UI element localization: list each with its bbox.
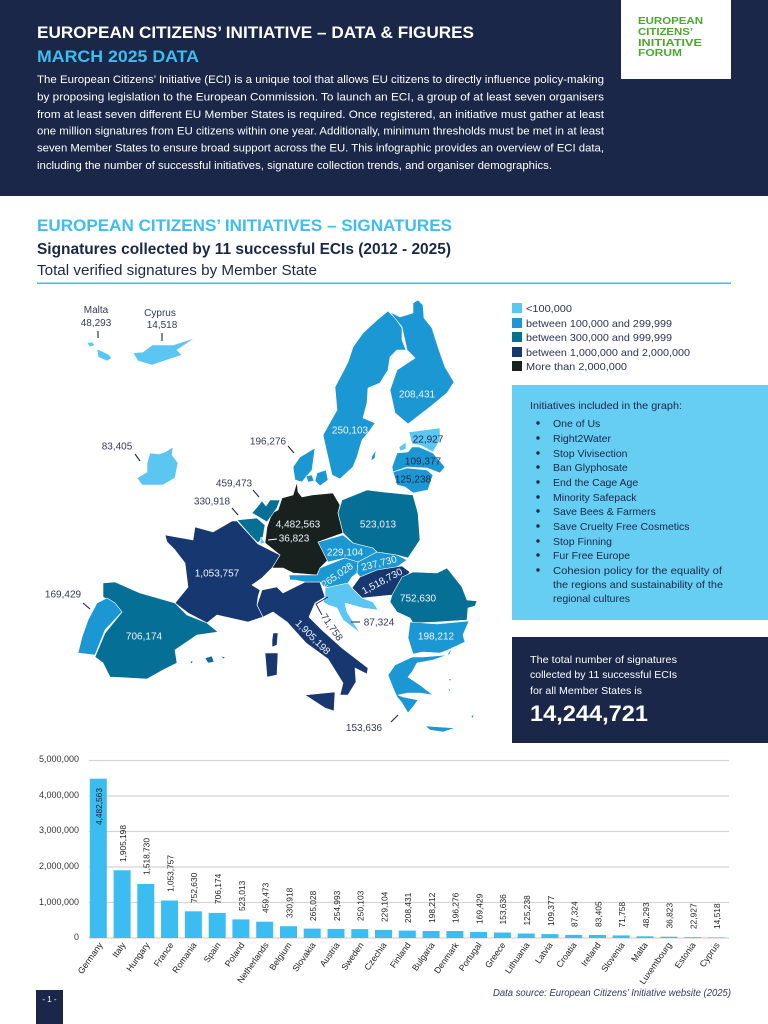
map legend: between 1,000,000 and 2,000,000 (526, 347, 690, 359)
section heading: Signatures collected by 11 successful ECIs (2012 - 2025) (37, 241, 451, 258)
map callout values: 48,293 (81, 318, 112, 329)
y axis labels: 4,000,000 (39, 790, 79, 800)
panel: initiatives included (512, 385, 768, 620)
map callout values: 36,823 (279, 534, 310, 544)
intro paragraph: one million signatures from EU citizens within one year. Additionally, minimum thresholds must be met in at least (37, 126, 604, 138)
intro paragraph: including the number of successful initiatives, signature collection trends, and organiser demographics. (37, 160, 552, 172)
bar value labels: 459,473 (260, 882, 270, 913)
map callout values: 4,482,563 (276, 520, 321, 530)
y axis labels: 3,000,000 (39, 825, 79, 835)
panel: initiatives included: Stop Finning (553, 536, 612, 548)
panel: initiatives included: One of Us (553, 418, 600, 430)
bar value labels: 254,993 (332, 890, 342, 921)
map callout values: 523,013 (360, 520, 397, 530)
map callout values: 196,276 (250, 436, 287, 448)
map callout values: 1,053,757 (195, 568, 240, 580)
bar category labels: Latvia (533, 940, 555, 965)
bar category labels: Netherlands (235, 940, 271, 985)
bar category labels: Portugal (457, 940, 484, 973)
Poland (338, 490, 420, 558)
bar category labels: Estonia (673, 940, 698, 970)
map callout values: 14,518 (147, 320, 178, 331)
y axis labels: 5,000,000 (39, 754, 79, 764)
logo: European Citizens' Initiative Forum: CITIZENS’ (638, 26, 693, 38)
section heading: Total verified signatures by Member State (37, 262, 317, 279)
map callout values: 83,405 (102, 442, 133, 452)
map legend: More than 2,000,000 (526, 361, 627, 373)
map callout values: 1,905,198 (293, 618, 332, 658)
map callout values: 125,238 (395, 474, 432, 486)
logo: European Citizens' Initiative Forum (621, 0, 731, 79)
bar value labels: 752,630 (189, 872, 199, 903)
bar value labels: 250,103 (356, 890, 366, 921)
Slovenia and Croatia (323, 583, 378, 633)
bar category labels: Hungary (124, 940, 152, 973)
bar category labels: Germany (76, 940, 105, 976)
header band (0, 0, 768, 196)
bar category labels: Poland (223, 940, 247, 969)
bar value labels: 83,405 (594, 901, 604, 927)
bar category labels: Denmark (432, 940, 461, 975)
bar category labels: Slovenia (599, 940, 627, 974)
bar category labels: Czechia (362, 940, 389, 972)
y axis labels: 1,000,000 (39, 897, 79, 907)
Slovakia (357, 552, 407, 577)
bar value labels (94, 788, 722, 929)
bar category labels: Slovakia (290, 940, 318, 973)
map callout values: 109,377 (405, 456, 442, 468)
bar value labels: 4,482,563 (94, 788, 104, 825)
bar value labels: 523,013 (237, 880, 247, 911)
map callout values: 752,630 (400, 594, 437, 604)
bar value labels: 198,212 (427, 892, 437, 923)
panel: initiatives included: regional cultures (553, 593, 630, 605)
Sardinia (265, 653, 278, 677)
Bulgaria (408, 621, 469, 654)
Denmark (293, 448, 328, 486)
map callout values: 229,104 (327, 548, 364, 558)
bar value labels: 22,927 (688, 903, 698, 929)
map callout values: 265,028 (320, 561, 356, 591)
panel: total signatures: 14,244,721 (530, 701, 648, 726)
panel: initiatives included: Cohesion policy for the equality of (553, 565, 722, 577)
map leader lines (83, 331, 398, 722)
bar category labels: Belgium (267, 940, 294, 972)
bar category labels: Finland (388, 940, 413, 970)
bar category labels: Ireland (579, 940, 603, 968)
intro paragraph: The European Citizens’ Initiative (ECI) is a unique tool that allows EU citizens to directly influence policy-making (37, 74, 604, 86)
bar chart: signatures by Member State (39, 754, 729, 986)
map callout values: 208,431 (399, 390, 436, 400)
map callout values: 71,758 (318, 612, 345, 644)
bar value labels: 1,905,198 (118, 825, 128, 862)
Austria (289, 558, 358, 588)
Estonia island (399, 442, 406, 451)
bar category labels: Lithuania (503, 940, 532, 975)
panel: initiatives included: Initiatives included in the graph: (530, 400, 682, 412)
panel: total signatures: collected by 11 successful ECIs (530, 669, 677, 681)
panel: initiatives included: Minority Safepack (553, 492, 637, 504)
map callout values: 169,429 (45, 590, 82, 600)
France (165, 521, 280, 623)
Sicily (305, 692, 335, 711)
page number tab: - 1 - (42, 995, 57, 1004)
Sweden (323, 311, 406, 479)
bar category labels: France (152, 940, 176, 969)
Latvia (392, 447, 445, 473)
section heading: EUROPEAN CITIZENS’ INITIATIVES – SIGNATURES (37, 216, 452, 235)
intro paragraph: by proposing legislation to the European Commission. To launch an ECI, a group of at least seven organisers (37, 92, 605, 104)
bar value labels: 48,293 (641, 902, 651, 928)
Balearic Islands (190, 656, 225, 664)
bar value labels: 169,429 (474, 893, 484, 924)
bar value labels: 109,377 (546, 895, 556, 926)
Luxembourg (260, 537, 265, 544)
bar value labels: 125,238 (522, 895, 532, 926)
panel: initiatives included: Right2Water (553, 433, 611, 445)
bar value labels: 706,174 (213, 873, 223, 904)
panel: initiatives included: Fur Free Europe (553, 550, 630, 562)
map callout values: 237,730 (360, 554, 399, 574)
intro paragraph: from at least seven different EU Member States is required. Once registered, an initiative must gather at least (37, 109, 604, 121)
logo: European Citizens' Initiative Forum: EUROPEAN (638, 15, 703, 27)
bar value labels: 153,636 (498, 894, 508, 924)
bar value labels: 265,028 (308, 890, 318, 921)
bar category labels: Greece (483, 940, 508, 970)
panel: initiatives included: the regions and sustainability of the (553, 579, 723, 591)
bar value labels: 196,276 (450, 892, 460, 923)
panel: initiatives included: End the Cage Age (553, 477, 638, 489)
y axis labels: 2,000,000 (39, 861, 79, 871)
Hungary (352, 566, 410, 598)
bar category labels: Spain (202, 940, 223, 965)
Czechia (318, 535, 377, 562)
map callout values: 706,174 (126, 632, 163, 642)
map callout values: Cyprus (144, 308, 176, 319)
map callout values: 330,918 (194, 496, 231, 508)
map callout values: 1,518,730 (360, 566, 405, 597)
panel: total signatures: The total number of signatures (530, 654, 677, 666)
intro paragraph (37, 74, 605, 172)
bar value labels: 330,918 (284, 887, 294, 918)
title: EUROPEAN CITIZENS’ INITIATIVE – DATA & FIGURES (37, 23, 474, 42)
Finland (390, 300, 454, 424)
subtitle: date: MARCH 2025 DATA (37, 47, 199, 66)
bar category labels: Romania (170, 940, 199, 975)
bar value labels: 229,104 (380, 891, 390, 922)
page number tab (36, 990, 63, 1024)
bar category labels: Bulgaria (410, 940, 437, 973)
y axis labels (39, 754, 79, 942)
map callout values: 198,212 (418, 632, 455, 642)
Belgium (237, 518, 265, 543)
bar category labels: Austria (318, 940, 342, 969)
y axis labels: 0 (74, 932, 79, 942)
panel: initiatives included: Save Cruelty Free Cosmetics (553, 521, 690, 533)
map of EU member states (78, 300, 477, 732)
bar value labels: 71,758 (617, 902, 627, 928)
Italy (257, 582, 368, 695)
panel: total signatures: for all Member States is (530, 685, 642, 697)
Romania (390, 568, 477, 623)
data source note: Data source: European Citizens’ Initiative website (2025) (493, 988, 731, 999)
bar value labels: 1,053,757 (166, 855, 176, 892)
panel: initiatives included: Save Bees & Farmers (553, 506, 656, 518)
Greece (388, 648, 474, 732)
Spain (95, 582, 218, 679)
panel: total signatures (512, 637, 768, 743)
map callout values (45, 305, 455, 734)
Ireland (137, 447, 178, 485)
bar category labels (76, 940, 722, 986)
Portugal (78, 598, 122, 655)
map legend (512, 303, 690, 373)
map legend: between 100,000 and 299,999 (526, 318, 672, 330)
map callout values: 250,103 (332, 426, 369, 436)
map legend: between 300,000 and 999,999 (526, 332, 672, 344)
Corsica (272, 633, 278, 647)
bar category labels: Cyprus (697, 940, 722, 969)
map legend: <100,000 (526, 303, 572, 315)
map callout values: Malta (84, 305, 109, 316)
logo: European Citizens' Initiative Forum: FORUM (638, 47, 682, 59)
Cyprus (133, 338, 195, 365)
bar value labels: 36,823 (664, 903, 674, 928)
Netherlands (252, 500, 280, 522)
bar value labels: 208,431 (403, 892, 413, 923)
bar value labels: 14,518 (712, 903, 722, 929)
map callout values: 459,473 (216, 478, 253, 490)
bars (90, 779, 725, 938)
bar category labels: Italy (110, 940, 128, 959)
Germany (265, 482, 343, 575)
Malta (87, 342, 112, 361)
bar category labels: Croatia (554, 940, 579, 969)
bar category labels: Malta (629, 940, 650, 964)
map callout values: 87,324 (364, 618, 395, 628)
logo: European Citizens' Initiative Forum: INITIATIVE (638, 37, 702, 49)
bar value labels: 1,518,730 (142, 838, 152, 875)
panel: initiatives included: Stop Vivisection (553, 448, 628, 460)
bar category labels: Sweden (339, 940, 366, 972)
map callout values: 153,636 (346, 723, 383, 734)
panel: initiatives included: Ban Glyphosate (553, 462, 628, 474)
intro paragraph: seven Member States to ensure broad support across the EU. This infographic provides an overview of ECI data, (37, 142, 604, 154)
map callout values: 22,927 (413, 434, 444, 446)
bar value labels: 87,324 (570, 901, 580, 927)
section heading (37, 216, 731, 284)
Gotland (371, 450, 376, 461)
bar category labels: Luxembourg (637, 940, 674, 986)
Lithuania (393, 468, 433, 493)
Estonia (409, 428, 440, 452)
